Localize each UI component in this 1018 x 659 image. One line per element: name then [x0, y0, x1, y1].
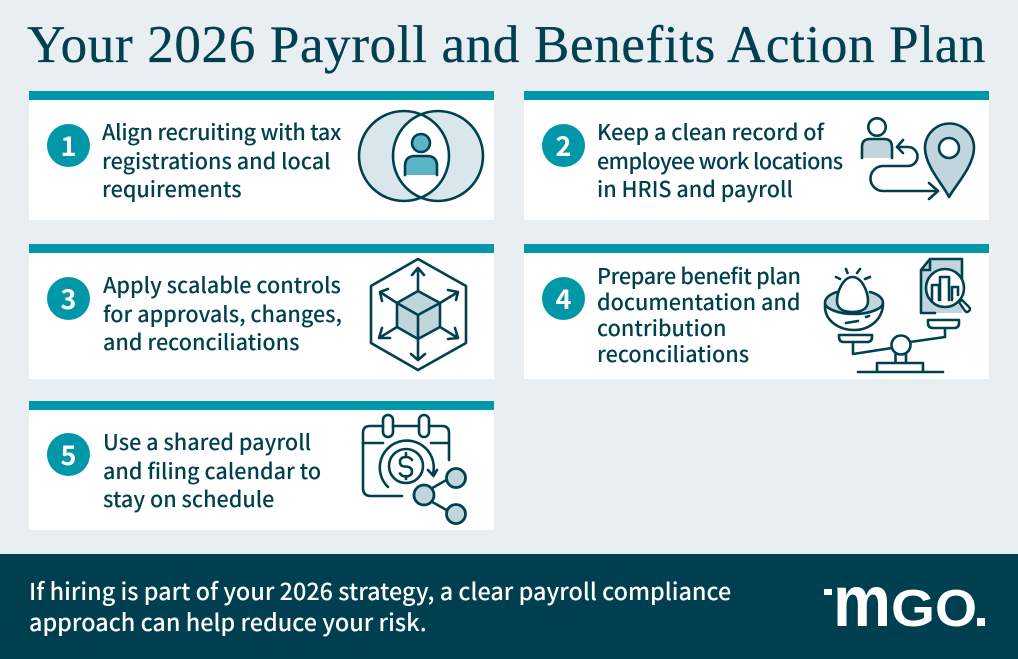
- text: step 3: for approvals, changes,: [103, 298, 342, 328]
- icon: calendar with dollar and share nodes: [362, 414, 467, 525]
- text: step 2: [597, 116, 843, 204]
- logo: MGO: G: [891, 580, 935, 638]
- text: step 1: [102, 116, 341, 204]
- icon: overlapping circles with person: [358, 110, 484, 202]
- icon: hexagon with cube and arrows: [370, 258, 468, 372]
- number badge 1: 1: [61, 125, 76, 164]
- panel: step 5: [29, 401, 494, 530]
- text: step 4: reconciliations: [597, 338, 749, 369]
- number badge 2: [542, 124, 585, 167]
- text: step 1: requirements: [102, 173, 242, 204]
- footer text: [29, 573, 731, 638]
- footer text: If hiring is part of your 2026 strategy, a clear payroll compliance: [29, 573, 731, 607]
- text: step 4: Prepare benefit plan: [597, 260, 801, 291]
- number badge 3: [47, 277, 90, 320]
- icon: scale with egg nest and report: [824, 258, 972, 374]
- text: step 1: registrations and local: [102, 144, 331, 176]
- text: step 2: in HRIS and payroll: [597, 173, 793, 204]
- icon: person, route and map pin: [860, 117, 976, 200]
- number badge 4: 4: [556, 278, 571, 317]
- panel: step 1: [29, 91, 494, 220]
- panel: step 4: [524, 244, 989, 379]
- text: step 4: [597, 260, 801, 369]
- number badge 3: 3: [61, 278, 76, 317]
- text: step 5: and filing calendar to: [103, 454, 321, 486]
- panel: step 3: [29, 244, 494, 379]
- text: step 3: [103, 269, 342, 357]
- text: step 1: Align recruiting with tax: [102, 116, 341, 147]
- text: step 2: employee work locations: [597, 144, 843, 176]
- text: step 4: contribution: [597, 312, 726, 343]
- number badge 1: [47, 124, 90, 167]
- text: step 3: Apply scalable controls: [103, 269, 341, 300]
- logo: MGO: O: [935, 580, 977, 638]
- number badge 5: [47, 433, 90, 476]
- logo: MGO: m: [833, 562, 891, 642]
- text: step 4: documentation and: [597, 286, 800, 317]
- number badge 4: [542, 277, 585, 320]
- footer banner: [0, 554, 1018, 659]
- footer text: approach can help reduce your risk.: [29, 604, 427, 638]
- text: step 5: Use a shared payroll: [103, 426, 311, 457]
- number badge 2: 2: [556, 125, 571, 164]
- text: step 3: and reconciliations: [103, 326, 300, 357]
- text: step 5: [103, 426, 321, 514]
- title: Your 2026 Payroll and Benefits Action Plan: [27, 16, 986, 74]
- text: step 5: stay on schedule: [103, 483, 274, 514]
- logo: MGO: [824, 562, 985, 642]
- number badge 5: 5: [61, 434, 76, 473]
- panel: step 2: [524, 91, 989, 220]
- text: step 2: Keep a clean record of: [597, 116, 824, 147]
